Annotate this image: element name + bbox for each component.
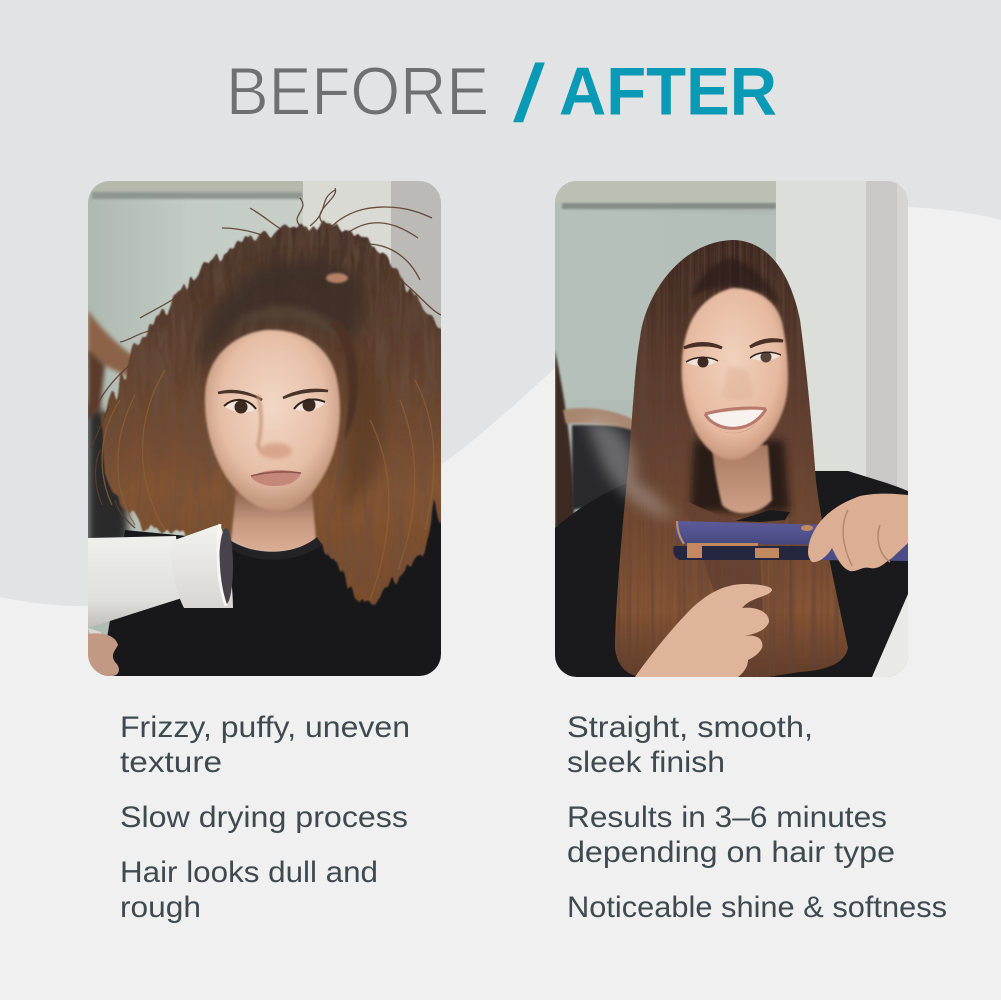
collar bbox=[231, 537, 322, 560]
hair mass bbox=[90, 188, 450, 604]
fingers in hair bbox=[326, 273, 348, 283]
title word: before: BEFORE bbox=[226, 54, 489, 130]
title bbox=[226, 49, 777, 138]
neckline bbox=[735, 510, 790, 522]
arm in hair bbox=[370, 300, 441, 380]
title word: after: AFTER bbox=[559, 54, 777, 130]
background wave bbox=[0, 207, 1001, 1000]
before item 1: Frizzy, puffy, uneven bbox=[120, 711, 410, 744]
before item 3: Hair looks dull and bbox=[120, 856, 378, 889]
before item 3 bbox=[120, 856, 378, 924]
icon: hair dryer bbox=[88, 524, 233, 640]
panel: before photo bbox=[88, 181, 450, 676]
held hair section bbox=[682, 498, 763, 616]
face bbox=[682, 288, 788, 459]
black shirt bbox=[100, 499, 441, 676]
mirror reflection bbox=[88, 310, 134, 538]
neck bbox=[231, 492, 316, 552]
after item 2: Results in 3–6 minutes bbox=[567, 801, 887, 834]
reflection of person bbox=[555, 350, 634, 530]
before item 1 bbox=[120, 711, 410, 779]
before item 3: rough bbox=[120, 891, 201, 924]
hair across forehead bbox=[330, 320, 358, 440]
after item 2: depending on hair type bbox=[567, 836, 895, 869]
after item 1: Straight, smooth, bbox=[567, 711, 813, 744]
icon: hair straightener bbox=[673, 521, 908, 561]
panel: after photo bbox=[555, 181, 908, 677]
neck bbox=[712, 445, 772, 513]
title slash: / bbox=[514, 49, 545, 138]
before item 2: Slow drying process bbox=[120, 801, 408, 834]
finger gaps bbox=[843, 510, 890, 566]
hair bbox=[615, 240, 848, 677]
after item 1: sleek finish bbox=[567, 746, 725, 779]
before item 1: texture bbox=[120, 746, 222, 779]
black shirt bbox=[555, 471, 908, 677]
text block: after list bbox=[567, 711, 947, 924]
under-hair shadow bbox=[690, 440, 790, 512]
after item 1 bbox=[567, 711, 813, 779]
hand holding dryer bbox=[88, 633, 119, 676]
hand holding hair bbox=[635, 584, 772, 677]
hand on straightener bbox=[808, 494, 908, 571]
face bbox=[205, 330, 340, 511]
steam bbox=[585, 419, 677, 520]
after item 2 bbox=[567, 801, 895, 869]
text block: before list bbox=[120, 711, 410, 924]
after item 3: Noticeable shine & softness bbox=[567, 891, 947, 924]
